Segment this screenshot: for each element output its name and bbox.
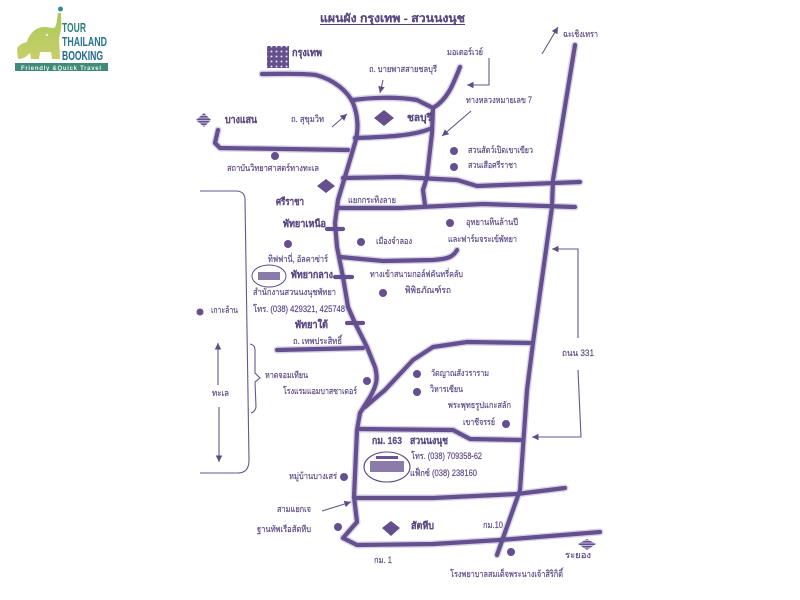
road: km 163 Nong Nooch (360, 429, 522, 440)
road: golf course entry (340, 250, 457, 261)
label: highway 7: ทางหลวงหมายเลข 7 (466, 95, 532, 105)
arrow: Sukhumvit (332, 114, 347, 127)
label: marine science institute: สถาบันวิทยาศาสตร์ทางทะเล (227, 162, 319, 173)
label: Sriracha tiger zoo: สวนเสือศรีราชา (468, 160, 517, 170)
label: Sattahip: สัตหีบ (411, 520, 434, 532)
road: route 331 (497, 45, 575, 555)
label: Nong Nooch Pattaya office: สำนักงานสวนนงนุชพัทยา (253, 287, 336, 298)
logo text: THAILAND: THAILAND (62, 34, 107, 49)
icon: Rayong diamond (578, 539, 596, 550)
logo: Nong Nooch (364, 452, 410, 482)
icon: Bangkok square (267, 46, 289, 68)
label: sea: ทะเล (212, 388, 229, 398)
arrow: route 331 upper (552, 249, 578, 338)
location dots (196, 147, 515, 556)
icon: Sattahip diamond (382, 521, 400, 536)
label: km 1: กม. 1 (374, 555, 392, 565)
road: south cross road (355, 488, 565, 498)
arrow: sea down (218, 407, 220, 462)
label: Thepprasit road: ถ. เทพประสิทธิ์ (293, 334, 343, 346)
label: T junction: สามแยกเจ (277, 504, 311, 514)
label: Krathing Lai junction: แยกกระทิงลาย (348, 195, 396, 205)
road: Thepprasit (277, 348, 363, 350)
label: Jomtien beach: หาดจอมเทียน (265, 370, 308, 380)
label: Wat Yannasangwararam: วัดญาณสังวราราม (431, 368, 489, 378)
label: carved Buddha: พระพุทธรูปแกะสลัก (448, 400, 511, 411)
label: km 163: กม. 163 (372, 436, 402, 447)
label: Ambassador hotel: โรงแรมแอมบาสซาเดอร์ (283, 385, 357, 396)
road: Pattaya Central tick (335, 275, 352, 279)
arrow: highway 7 (442, 111, 471, 136)
title: แผนผัง กรุงเทพ - สวนนงนุช (320, 12, 466, 26)
label: motorway: มอเตอร์เวย์ (447, 46, 483, 57)
logo tagline bar: Friendly &Quick Travel (21, 66, 101, 72)
arrow: bypass (380, 80, 383, 93)
logo text: TOUR: TOUR (62, 20, 86, 35)
label: Mini Siam: เมืองจำลอง (376, 236, 412, 246)
road: Sukhumvit main route (262, 74, 600, 545)
label: Ban Bang Saray: หมู่บ้านบางเสร่ (289, 471, 337, 482)
icon: elephant (17, 6, 63, 59)
label: Chonburi bypass: ถ. บายพาสสายชลบุรี (369, 64, 437, 75)
label: million year stone park: อุทยานหินล้านปี (466, 217, 518, 228)
road network (215, 45, 600, 555)
arrow: route 331 lower (532, 370, 581, 437)
logo: Pattaya office (252, 265, 286, 287)
label: golf course entry: ทางเข้าสนามกอล์ฟคันทรี่คลับ (370, 267, 463, 279)
label: Central Pattaya: พัทยากลาง (291, 269, 333, 281)
label: Khao Kheow zoo: สวนสัตว์เปิดเขาเขียว (468, 144, 533, 155)
label: South Pattaya: พัทยาใต้ (295, 318, 328, 331)
road: Bang Saen (215, 130, 348, 150)
road network halo (215, 45, 600, 555)
arrow: motorway (467, 58, 489, 85)
icon: Sriracha diamond (317, 179, 335, 193)
label: office phone: โทร. (038) 429321, 425748 (253, 304, 345, 314)
road: Chonburi lower link (355, 128, 432, 138)
label: Nong Nooch fax: แฟ็กซ์ (038) 238160 (410, 466, 477, 478)
label: Sukhumvit: ถ. สุขุมวิท (291, 114, 324, 125)
arrow: sea up (217, 343, 219, 385)
road: temple road (365, 342, 533, 407)
icon: Chonburi diamond (374, 110, 394, 126)
logo text: BOOKING: BOOKING (62, 48, 103, 63)
label: Chonburi: ชลบุรี (407, 112, 433, 124)
label: Nong Nooch phone: โทร. (038) 709358-62 (411, 451, 482, 461)
label: Tiffany Alcazar: ทิฟฟานี่, อัลคาซ่าร์ (268, 252, 328, 264)
road: Pattaya South tick (347, 321, 363, 325)
label: Sriracha: ศรีราชา (276, 196, 304, 208)
arrow: T junction (322, 502, 351, 511)
road: cross road north (343, 177, 580, 186)
label: route 331: ถนน 331 (562, 348, 594, 358)
label: Sattahip naval base: ฐานทัพเรือสัตหีบ (257, 524, 311, 535)
road: Chonburi bypass (353, 98, 433, 108)
icon: Bang Saen diamond (196, 113, 211, 127)
label: Bang Saen: บางแสน (225, 115, 257, 126)
label: North Pattaya: พัทยาเหนือ (283, 218, 326, 230)
label: Queen Sirikit hospital: โรงพยาบาลสมเด็จพระนางเจ้าสิริกิติ์ (450, 567, 564, 579)
logo: Tour Thailand Booking (15, 6, 108, 72)
label: Nong Nooch: สวนนงนุช (410, 436, 448, 447)
label: Rayong: ระยอง (565, 550, 591, 560)
arrow: to Chachoengsao (542, 27, 558, 54)
road: Pattaya North tick (327, 227, 343, 231)
label: km 10: กม.10 (483, 520, 503, 530)
label: car museum: พิพิธภัณฑ์รถ (405, 284, 451, 295)
Jomtien brace (250, 344, 260, 413)
road: motorway and highway 7 (423, 67, 460, 205)
label: crocodile farm: และฟาร์มจระเข้พัทยา (448, 233, 517, 244)
label: Viharn Sien: วิหารเซียน (430, 384, 463, 394)
label: Koh Larn: เกาะล้าน (211, 305, 238, 315)
sea bracket box (200, 191, 249, 473)
label: Khao Chi Chan: เขาชีจรรย์ (463, 416, 495, 427)
label: Chachoengsao: ฉะเชิงเทรา (563, 29, 598, 39)
road: Krathing Lai cross road (338, 204, 575, 208)
label: Bangkok: กรุงเทพ (292, 48, 322, 59)
